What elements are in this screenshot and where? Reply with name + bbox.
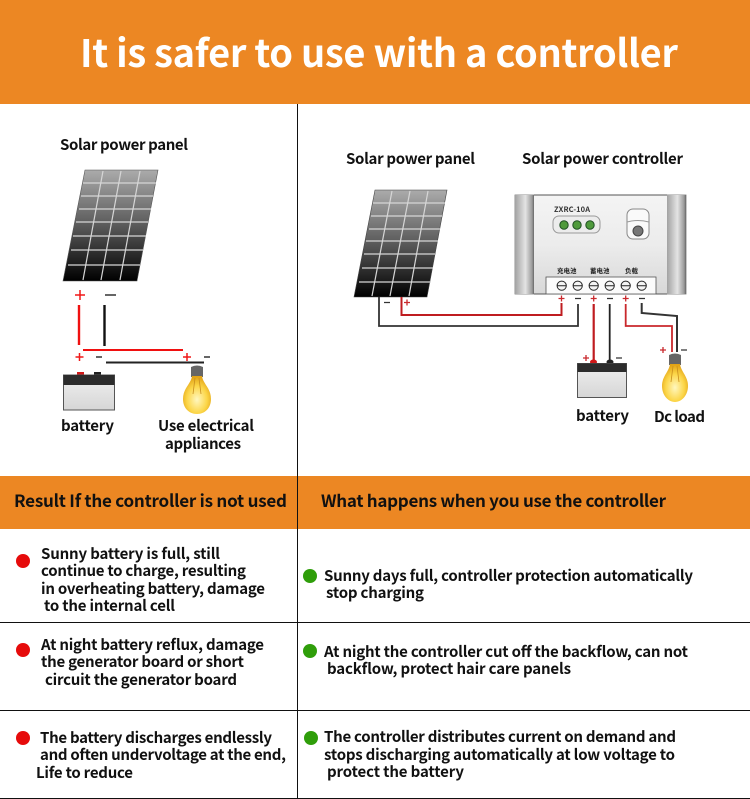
icon: charge controller: 充电池	[557, 266, 577, 275]
icon: green dot	[304, 731, 318, 745]
icon: solar panel left	[63, 170, 158, 281]
icon: charge controller: 蓄电池	[590, 266, 610, 275]
text: row 1 right: Sunny days full, controller protection automatically	[324, 565, 693, 586]
text: row 2 left	[40, 634, 264, 690]
text: row 1 left: Sunny battery is full, still	[41, 543, 220, 564]
heading: used: What happens when you use the controller	[321, 487, 667, 512]
text: row 3 left	[36, 727, 286, 783]
icon: red dot	[16, 731, 30, 745]
terminal block	[546, 277, 656, 294]
row 2 right	[303, 641, 689, 679]
text: row 2 right: backflow, protect hair care panels	[327, 658, 571, 679]
label: dc load: Dc load	[654, 406, 705, 427]
label: appliances	[158, 415, 254, 454]
icon: charge controller: 负载	[625, 266, 638, 275]
text: row 3 right: The controller distributes current on demand and	[324, 726, 676, 747]
label: solar panel right: Solar power panel	[346, 148, 475, 169]
heading: not used: Result If the controller is not used	[14, 487, 287, 512]
text: row 1 left	[41, 543, 265, 616]
label: battery right: battery	[576, 405, 629, 426]
text: row 3 left: Life to reduce	[36, 762, 133, 783]
indicator lights	[553, 216, 600, 233]
wires: controller circuit	[379, 296, 687, 361]
icon: red dot	[16, 554, 30, 568]
label: controller: Solar power controller	[522, 148, 683, 169]
icon: bulb left	[183, 366, 211, 414]
text: row 2 right	[323, 641, 689, 679]
text: row 2 right: At night the controller cut off the backflow, can not	[323, 641, 689, 662]
panel: with controller diagram	[346, 148, 705, 427]
text: row 3 right: protect the battery	[327, 761, 464, 782]
title: It is safer to use with a controller	[80, 23, 678, 78]
label: appliances: Use electrical	[158, 415, 254, 436]
text: row 2 left: At night battery reflux, damage	[40, 634, 264, 655]
icon: charge controller	[515, 195, 686, 294]
text: row 3 right: stops discharging automatically at low voltage to	[324, 744, 675, 765]
icon: solar panel right	[354, 190, 447, 297]
text: row 1 right: stop charging	[326, 582, 424, 603]
text: row 1 right	[324, 565, 693, 603]
header banner	[0, 0, 750, 104]
text: row 2 left: the generator board or short	[41, 651, 245, 672]
icon: green dot	[303, 569, 317, 583]
text: row 1 left: continue to charge, resulting	[41, 560, 246, 581]
text: row 1 left: to the internal cell	[44, 595, 175, 616]
text: row 3 right	[324, 726, 676, 782]
icon: bulb right	[662, 354, 688, 402]
text: row 2 left: circuit the generator board	[45, 669, 237, 690]
icon: battery left	[64, 372, 114, 410]
text: row 3 left: The battery discharges endlessly	[40, 727, 272, 748]
button	[627, 209, 649, 239]
icon: charge controller: ZXRC-10A	[554, 204, 590, 215]
row 1 left	[16, 543, 265, 616]
section header band	[0, 476, 750, 529]
panel: without controller diagram	[60, 134, 254, 454]
wires: left circuit	[75, 290, 210, 362]
icon: battery right	[578, 360, 626, 398]
text: row 3 left: and often undervoltage at the end,	[40, 744, 286, 765]
row 3 left	[16, 727, 286, 783]
text: row 1 left: in overheating battery, damage	[41, 578, 265, 599]
row 1 right	[303, 565, 693, 603]
row 3 right	[304, 726, 676, 782]
icon: red dot	[16, 643, 30, 657]
row 2 left	[16, 634, 264, 690]
icon: green dot	[303, 644, 317, 658]
label: appliances: appliances	[165, 433, 241, 454]
label: battery left: battery	[61, 415, 114, 436]
label: solar panel left: Solar power panel	[60, 134, 188, 155]
